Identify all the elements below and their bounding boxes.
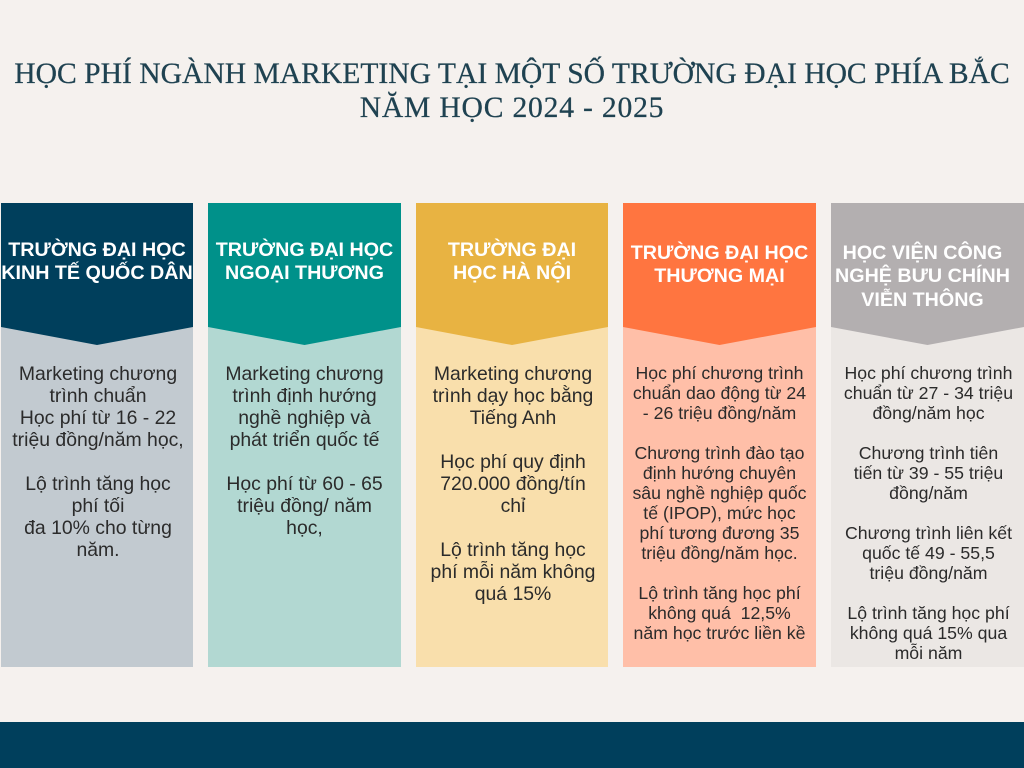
text: Ngoại thương: học, xyxy=(286,517,323,539)
text: Thương mại: Lộ trình tăng học phí xyxy=(638,583,801,603)
text: Bưu chính Viễn thông: đồng/năm xyxy=(889,483,968,503)
heading: Bưu chính Viễn thông: NGHỆ BƯU CHÍNH xyxy=(835,265,1010,287)
panel: Thương mại xyxy=(623,203,816,667)
text: Hà Nội: trình dạy học bằng xyxy=(433,385,593,407)
text: Thương mại: - 26 triệu đồng/năm xyxy=(643,403,796,423)
text: Bưu chính Viễn thông: Lộ trình tăng học phí xyxy=(847,603,1010,623)
heading: Bưu chính Viễn thông: VIỄN THÔNG xyxy=(861,289,984,311)
text: Hà Nội: chỉ xyxy=(501,495,525,517)
heading: Hà Nội: HỌC HÀ NỘI xyxy=(453,262,571,284)
text: Hà Nội: Học phí quy định xyxy=(440,451,586,473)
text: Kinh tế Quốc dân: Marketing chương xyxy=(19,363,177,385)
footer band xyxy=(0,722,1024,768)
text: Kinh tế Quốc dân: Lộ trình tăng học xyxy=(25,473,171,495)
text: Bưu chính Viễn thông: Chương trình liên kết xyxy=(845,523,1012,543)
heading: Kinh tế Quốc dân xyxy=(1,238,193,284)
text: Ngoại thương: Học phí từ 60 - 65 xyxy=(226,473,383,495)
text: Thương mại xyxy=(632,363,807,643)
heading: Hà Nội: TRƯỜNG ĐẠI xyxy=(448,239,576,261)
text: Bưu chính Viễn thông: không quá 15% qua xyxy=(850,623,1007,643)
heading: Kinh tế Quốc dân: KINH TẾ QUỐC DÂN xyxy=(1,262,193,284)
text: Thương mại: chuẩn dao động từ 24 xyxy=(633,383,806,403)
panel: Hà Nội xyxy=(416,203,608,667)
text: Thương mại: triệu đồng/năm học. xyxy=(641,543,798,563)
text: Bưu chính Viễn thông: mỗi năm xyxy=(895,643,962,663)
text: Thương mại: tế (IPOP), mức học xyxy=(643,503,796,523)
text: Ngoại thương: nghề nghiệp và xyxy=(238,407,371,429)
text: Bưu chính Viễn thông: Chương trình tiên xyxy=(859,443,998,463)
text: Hà Nội: 720.000 đồng/tín xyxy=(440,473,586,495)
text: Thương mại: sâu nghề nghiệp quốc xyxy=(632,483,807,503)
panel: Bưu chính Viễn thông xyxy=(831,203,1024,667)
text: Bưu chính Viễn thông: tiến từ 39 - 55 triệu xyxy=(854,463,1003,483)
text: Hà Nội: quá 15% xyxy=(475,583,551,605)
panel: Kinh tế Quốc dân xyxy=(1,203,193,667)
heading: Thương mại: THƯƠNG MẠI xyxy=(654,265,785,287)
text: Ngoại thương: phát triển quốc tế xyxy=(230,429,379,451)
text: Thương mại: Học phí chương trình xyxy=(636,363,803,383)
text: Kinh tế Quốc dân: trình chuẩn xyxy=(49,385,147,407)
text: Thương mại: Chương trình đào tạo xyxy=(635,443,804,463)
heading: Ngoại thương: NGOẠI THƯƠNG xyxy=(225,262,384,284)
text: Kinh tế Quốc dân xyxy=(12,363,184,561)
text: Ngoại thương: trình định hướng xyxy=(232,385,377,407)
text: Kinh tế Quốc dân: Học phí từ 16 - 22 xyxy=(20,407,176,429)
heading: Thương mại: TRƯỜNG ĐẠI HỌC xyxy=(631,242,808,264)
text: Ngoại thương: triệu đồng/ năm xyxy=(237,495,372,517)
heading: Ngoại thương xyxy=(216,238,393,284)
panel: Ngoại thương xyxy=(208,203,401,667)
heading: Bưu chính Viễn thông: HỌC VIỆN CÔNG xyxy=(843,242,1002,264)
text: Thương mại: phí tương đương 35 xyxy=(640,523,799,543)
text: Kinh tế Quốc dân: triệu đồng/năm học, xyxy=(12,429,184,451)
text: Kinh tế Quốc dân: năm. xyxy=(76,539,120,561)
heading: Hà Nội xyxy=(448,238,576,284)
text: Hà Nội: Lộ trình tăng học xyxy=(440,539,586,561)
heading: Bưu chính Viễn thông xyxy=(835,241,1010,311)
text: Hà Nội: Tiếng Anh xyxy=(470,407,556,429)
text: Hà Nội: phí mỗi năm không xyxy=(431,561,595,583)
text: Hà Nội: Marketing chương xyxy=(434,363,592,385)
title: HỌC PHÍ NGÀNH MARKETING TẠI MỘT SỐ TRƯỜNG ĐẠI HỌC PHÍA BẮC xyxy=(14,58,1010,90)
text: Bưu chính Viễn thông: triệu đồng/năm xyxy=(870,563,988,583)
text: Bưu chính Viễn thông xyxy=(844,363,1013,663)
text: Bưu chính Viễn thông: Học phí chương trình xyxy=(844,363,1012,383)
text: Kinh tế Quốc dân: đa 10% cho từng xyxy=(24,517,172,539)
text: Bưu chính Viễn thông: quốc tế 49 - 55,5 xyxy=(862,543,995,563)
text: Thương mại: định hướng chuyên xyxy=(643,463,796,483)
text: Thương mại: không quá 12,5% xyxy=(648,603,791,623)
title: NĂM HỌC 2024 - 2025 xyxy=(360,92,664,124)
text: Bưu chính Viễn thông: đồng/năm học xyxy=(872,403,985,423)
text: Ngoại thương: Marketing chương xyxy=(225,363,384,385)
title xyxy=(14,56,1010,124)
text: Ngoại thương xyxy=(225,363,384,539)
text: Bưu chính Viễn thông: chuẩn từ 27 - 34 triệu xyxy=(844,383,1013,403)
text: Thương mại: năm học trước liền kề xyxy=(634,623,805,643)
text: Hà Nội xyxy=(431,363,595,605)
text: Kinh tế Quốc dân: phí tối xyxy=(72,495,124,517)
heading: Thương mại xyxy=(630,242,808,287)
heading: Ngoại thương: TRƯỜNG ĐẠI HỌC xyxy=(216,239,393,261)
heading: Kinh tế Quốc dân: TRƯỜNG ĐẠI HỌC xyxy=(8,239,186,261)
